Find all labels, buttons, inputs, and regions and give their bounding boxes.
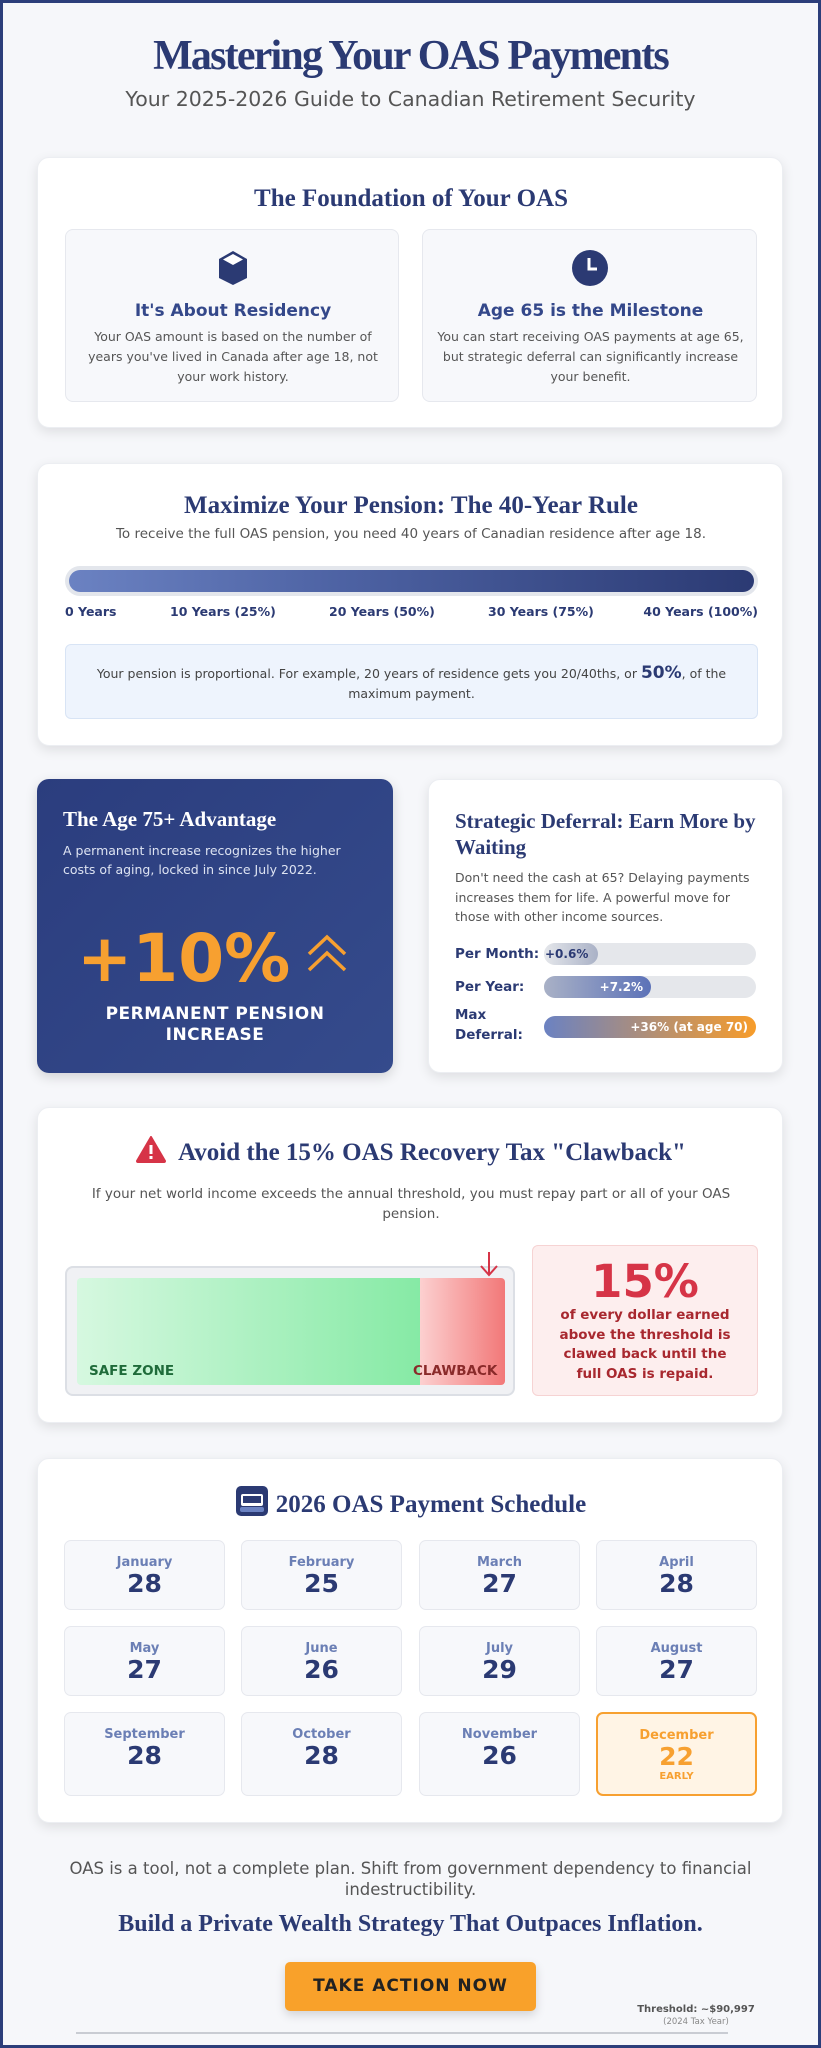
bar: per year bbox=[455, 976, 756, 998]
arrow: threshold bbox=[480, 1252, 498, 1276]
text: age 75: A permanent increase recognizes the higher costs of aging, locked in since July 2022. bbox=[63, 843, 341, 877]
month: june: 26 bbox=[304, 1655, 339, 1684]
month: august bbox=[596, 1626, 757, 1696]
bar: per year: Per Year: bbox=[455, 979, 524, 995]
bar labels: 10 Years (25%) bbox=[170, 604, 276, 619]
label: permanent increase bbox=[106, 1004, 324, 1045]
month: january: January bbox=[117, 1555, 172, 1570]
bar labels: 40 Years (100%) bbox=[643, 604, 758, 619]
calendar grid bbox=[64, 1540, 757, 1796]
panel: payment schedule bbox=[37, 1458, 783, 1823]
month: november: November bbox=[462, 1727, 537, 1742]
month: september bbox=[64, 1712, 225, 1796]
bar: per month: +0.6% bbox=[545, 947, 588, 961]
month: january: 28 bbox=[127, 1569, 162, 1598]
month: july bbox=[419, 1626, 580, 1696]
heading: residency: It's About Residency bbox=[135, 301, 331, 321]
month: october: 28 bbox=[304, 1741, 339, 1770]
icon: warning bbox=[136, 1136, 166, 1163]
heading: foundation: The Foundation of Your OAS bbox=[254, 185, 568, 212]
month: july: July bbox=[486, 1641, 513, 1656]
callout: 15%: of every dollar earned above the threshold is clawed back until the full OAS is repaid. bbox=[559, 1307, 731, 1382]
month: march: 27 bbox=[482, 1569, 517, 1598]
month: november bbox=[419, 1712, 580, 1796]
stat: +10%: +10% bbox=[77, 920, 290, 997]
month: october bbox=[241, 1712, 402, 1796]
month: july: 29 bbox=[482, 1655, 517, 1684]
month: april bbox=[596, 1540, 757, 1610]
month: may: 27 bbox=[127, 1655, 162, 1684]
month: december bbox=[596, 1712, 757, 1796]
month: december: December bbox=[639, 1728, 714, 1743]
month: june: June bbox=[305, 1641, 338, 1656]
subtitle: Your 2025-2026 Guide to Canadian Retirement Security bbox=[125, 87, 696, 111]
month: september: September bbox=[104, 1727, 185, 1742]
card: residency bbox=[65, 229, 399, 402]
title: Mastering Your OAS Payments bbox=[153, 33, 668, 79]
bar: max deferral bbox=[455, 1007, 756, 1043]
month: august: August bbox=[651, 1641, 702, 1656]
month: march: March bbox=[477, 1555, 522, 1570]
month: april: 28 bbox=[659, 1569, 694, 1598]
subtitle: 40-year rule: To receive the full OAS pension, you need 40 years of Canadian residence after age 18. bbox=[116, 526, 706, 542]
text: age 65: You can start receiving OAS payments at age 65, but strategic deferral can significantly increase your benefit. bbox=[437, 329, 744, 384]
bar: per month: Per Month: bbox=[455, 946, 539, 962]
bar: max deferral: Max bbox=[455, 1007, 486, 1023]
bar labels: 30 Years (75%) bbox=[488, 604, 594, 619]
icon: clock bbox=[572, 250, 608, 286]
text: residency: Your OAS amount is based on the number of years you've lived in Canada after age 18, not your work history. bbox=[88, 329, 378, 384]
button: take action: TAKE ACTION NOW bbox=[313, 1976, 508, 1996]
card: age 65 bbox=[422, 229, 757, 402]
heading: call to action: Build a Private Wealth Strategy That Outpaces Inflation. bbox=[118, 1911, 703, 1937]
heading: age 75: The Age 75+ Advantage bbox=[63, 807, 276, 831]
month: june bbox=[241, 1626, 402, 1696]
heading: 40-year rule: Maximize Your Pension: The 40-Year Rule bbox=[184, 492, 638, 519]
text: closing: OAS is a tool, not a complete plan. Shift from government dependency to financial indestructibility. bbox=[70, 1859, 751, 1899]
month: september: 28 bbox=[127, 1741, 162, 1770]
month: february: 25 bbox=[304, 1569, 339, 1598]
icon: house/shield bbox=[219, 251, 247, 285]
label: permanent increase: PERMANENT PENSION bbox=[106, 1004, 324, 1024]
panel: age 75 advantage bbox=[37, 779, 393, 1073]
month: january bbox=[64, 1540, 225, 1610]
panel: foundation bbox=[37, 157, 783, 428]
note: threshold bbox=[637, 2004, 755, 2027]
button: take action bbox=[285, 1962, 536, 2011]
text: deferral: Don't need the cash at 65? Delaying payments increases them for life. A powerful move for those with other income sources. bbox=[455, 870, 750, 924]
progress bar bbox=[65, 566, 758, 596]
month: may: May bbox=[130, 1641, 159, 1656]
month: february: February bbox=[289, 1555, 354, 1570]
bar: per month bbox=[455, 943, 756, 965]
month: may bbox=[64, 1626, 225, 1696]
heading: schedule: 2026 OAS Payment Schedule bbox=[276, 1491, 586, 1518]
month: december: EARLY bbox=[659, 1771, 694, 1782]
bar labels: 20 Years (50%) bbox=[329, 604, 435, 619]
month: august: 27 bbox=[659, 1655, 694, 1684]
note: threshold: (2024 Tax Year) bbox=[663, 2017, 729, 2027]
bar: per year: +7.2% bbox=[600, 980, 643, 994]
heading: clawback: Avoid the 15% OAS Recovery Tax "Clawback" bbox=[178, 1139, 686, 1166]
label: permanent increase: INCREASE bbox=[166, 1025, 264, 1045]
bar labels bbox=[65, 604, 758, 619]
month: february bbox=[241, 1540, 402, 1610]
callout: 15% bbox=[532, 1245, 758, 1396]
bar: max deferral: Deferral: bbox=[455, 1027, 523, 1043]
bar chart: deferral bbox=[455, 943, 756, 1043]
callout: 15%: 15% bbox=[591, 1255, 699, 1308]
chart: threshold bar bbox=[65, 1266, 515, 1396]
icon: chevrons up bbox=[308, 934, 346, 972]
icon: calendar bbox=[236, 1486, 268, 1516]
month: november: 26 bbox=[482, 1741, 517, 1770]
panel: 40-year rule bbox=[37, 463, 783, 746]
heading: age 65: Age 65 is the Milestone bbox=[478, 301, 703, 321]
bar labels: 0 Years bbox=[65, 604, 116, 619]
callout: proportional: Your pension is proportional. For example, 20 years of residence gets you 20/40ths, or 50%, of the maximum payment. bbox=[97, 663, 726, 701]
panel: strategic deferral bbox=[428, 779, 783, 1073]
heading: deferral: Strategic Deferral: Earn More by Waiting bbox=[455, 809, 756, 859]
month: october: October bbox=[292, 1727, 351, 1742]
month: march bbox=[419, 1540, 580, 1610]
month: april: April bbox=[659, 1555, 694, 1570]
label: clawback: CLAWBACK bbox=[413, 1363, 497, 1379]
bar: max deferral: +36% (at age 70) bbox=[630, 1020, 748, 1034]
text: clawback: If your net world income exceeds the annual threshold, you must repay part or all of your OAS pension. bbox=[92, 1186, 730, 1222]
note: threshold: Threshold: ~$90,997 bbox=[637, 2004, 755, 2015]
label: safe zone: SAFE ZONE bbox=[89, 1363, 174, 1379]
callout: proportional bbox=[65, 644, 758, 719]
month: december: 22 bbox=[659, 1742, 694, 1771]
panel: clawback bbox=[37, 1107, 783, 1423]
